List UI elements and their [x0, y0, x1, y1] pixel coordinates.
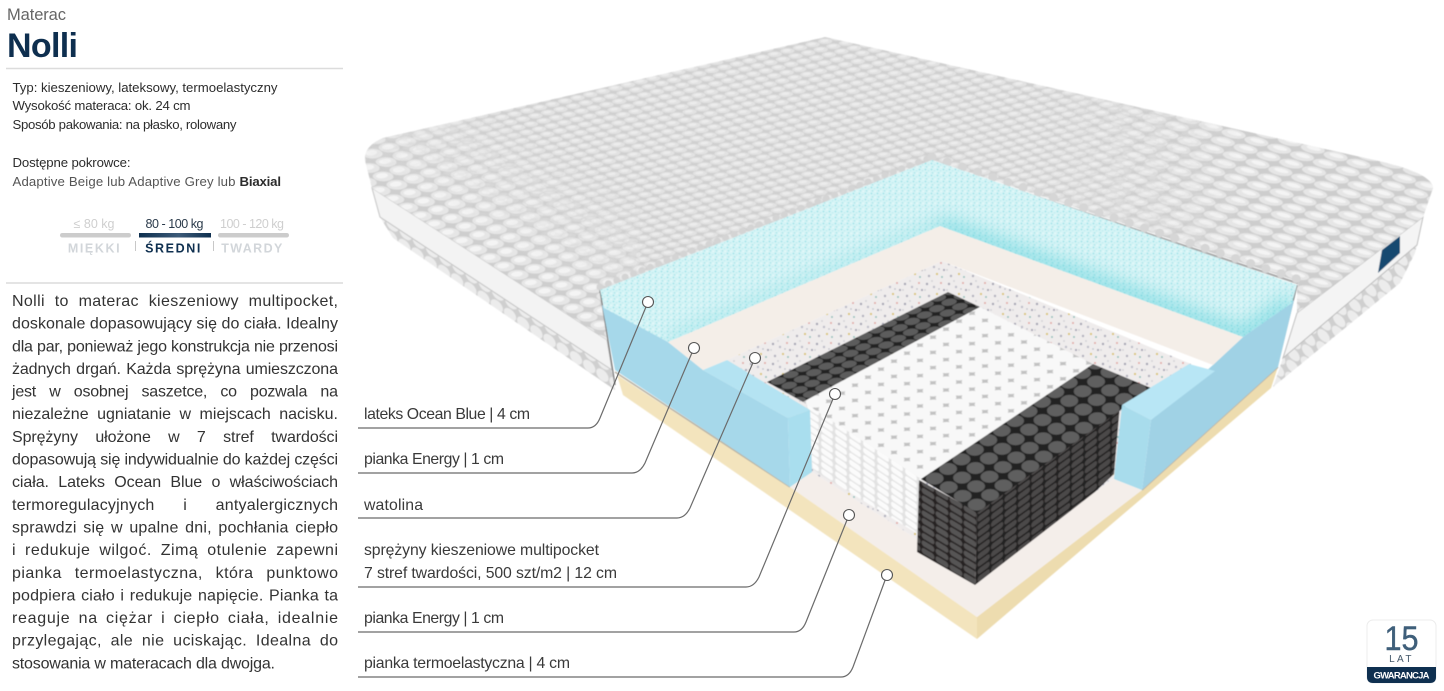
description paragraph: ciała. Lateks Ocean Blue o właściwościach: [12, 474, 338, 491]
description paragraph: doskonale dopasowujący się do ciała. Idealny: [12, 316, 338, 333]
right blue block: [1114, 364, 1215, 490]
specification text: Wysokość materaca: ok. 24 cm: [12, 98, 190, 113]
right side lower quilting: [1273, 245, 1417, 387]
mattress illustration: [340, 20, 1444, 639]
firmness: średni: [139, 217, 211, 256]
dark back zone: [767, 292, 980, 402]
layer: wadding: [727, 261, 1191, 575]
dark front zone left side: [917, 480, 977, 585]
cover label: [1378, 236, 1400, 273]
description paragraph: przylegając, ale nie uciskając. Idealna do: [12, 633, 338, 650]
callout: lateks Ocean Blue: lateks Ocean Blue | 4 cm: [364, 406, 530, 423]
badge number: 15: [1384, 620, 1419, 657]
description paragraph: [11, 293, 338, 672]
layer: lower Energy foam: [790, 472, 1142, 617]
firmness: twardy: [218, 217, 289, 256]
firmness: twardy: 100 - 120 kg: [220, 217, 284, 231]
left blue block: [703, 360, 812, 487]
firmness: miękki: [60, 217, 131, 256]
description paragraph: Nolli to materac kieszeniowy multipocket,: [12, 293, 338, 310]
description paragraph: dla par, ponieważ jego konstrukcja nie przenosi: [12, 338, 338, 355]
callout: sprężyny kieszeniowe: 7 stref twardości, 500 szt/m2 | 12 cm: [364, 565, 617, 582]
callout: watolina: [358, 352, 760, 518]
callout: pianka termoelastyczna: pianka termoelastyczna | 4 cm: [364, 655, 570, 672]
description paragraph: podpiera ciało i redukuje napięcie. Pianka ta: [12, 587, 338, 604]
specification text: Typ: kieszeniowy, lateksowy, termoelastyczny: [12, 80, 278, 95]
firmness: średni: ŚREDNI: [145, 240, 202, 256]
callout: pianka Energy upper: pianka Energy | 1 cm: [364, 451, 504, 468]
callout: pianka Energy lower: pianka Energy | 1 cm: [364, 610, 504, 627]
callout: pianka Energy upper: [358, 342, 700, 473]
badge caption: GWARANCJA: [1374, 670, 1430, 682]
callout: sprężyny kieszeniowe: [358, 388, 840, 587]
layer: blue side wall, right: [1142, 300, 1294, 490]
firmness: miękki: ≤ 80 kg: [74, 217, 114, 231]
description paragraph: stosowania w materacach dla dwojga.: [12, 655, 275, 672]
specification text: [12, 80, 281, 189]
badge unit: LAT: [1389, 654, 1414, 665]
layer: Ocean Blue latex: [600, 160, 1297, 342]
callout: watolina: watolina: [363, 497, 423, 514]
description paragraph: pianka termoelastyczna, która punktowo: [12, 565, 338, 582]
callout: lateks Ocean Blue: [358, 296, 654, 428]
description paragraph: Sprężyny ułożone w 7 stref twardości: [12, 429, 338, 446]
layer: upper Energy foam: [668, 226, 1243, 370]
firmness scale: [60, 217, 289, 256]
dark front zone right side: [975, 405, 1120, 585]
pocket springs: [767, 292, 1151, 585]
cover edge along the cut: [600, 157, 1297, 292]
left side lower quilting: [380, 217, 615, 390]
firmness: miękki: MIĘKKI: [68, 242, 121, 256]
description paragraph: i redukuje wilgoć. Zimą otulenie zapewni: [12, 542, 338, 559]
description paragraph: sprawdzi się w upalne dni, pochłania ciepło: [12, 520, 338, 536]
title: Nolli: Nolli: [7, 27, 78, 65]
white middle zone top: [803, 307, 1093, 479]
description paragraph: żadnych drgań. Każda sprężyna umieszczona: [12, 361, 338, 378]
firmness: twardy: TWARDY: [221, 242, 284, 256]
white middle zone side: [806, 402, 921, 536]
specification text: Sposób pakowania: na płasko, rolowany: [12, 117, 237, 132]
specification text: Adaptive Beige lub Adaptive Grey lub: [12, 174, 236, 189]
dark front zone top: [921, 364, 1151, 513]
firmness: średni: 80 - 100 kg: [146, 217, 204, 231]
heading: Materac: Materac: [7, 6, 66, 24]
badge footer: [1367, 667, 1436, 683]
description paragraph: dopasowują się indywidualnie do każdej części: [12, 452, 338, 468]
layer: bottom thermoelastic foam: [615, 367, 1278, 639]
description paragraph: jest w osobnej saszetce, co pozwala na: [11, 384, 338, 401]
quilted top cover: [364, 36, 1433, 338]
warranty badge: [1367, 620, 1436, 683]
callout: sprężyny kieszeniowe: sprężyny kieszeniowe multipocket: [364, 542, 600, 559]
layer: blue side wall, left: [602, 305, 790, 487]
cut edge of the cover: [600, 285, 1297, 385]
description paragraph: reaguje na ciężar i ciepło ciała, idealnie: [12, 610, 338, 627]
description paragraph: termoregulacyjnych i antyalergicznych: [12, 497, 338, 514]
callout: pianka termoelastyczna: [358, 570, 892, 677]
left side band: [372, 188, 612, 370]
specification text: Dostępne pokrowce:: [12, 155, 130, 170]
callout: pianka Energy lower: [358, 510, 854, 632]
description paragraph: niezależne ugniatanie w miejscach nacisku.: [12, 406, 338, 423]
specification text: Biaxial: [240, 174, 281, 189]
right side band: [1283, 217, 1423, 358]
